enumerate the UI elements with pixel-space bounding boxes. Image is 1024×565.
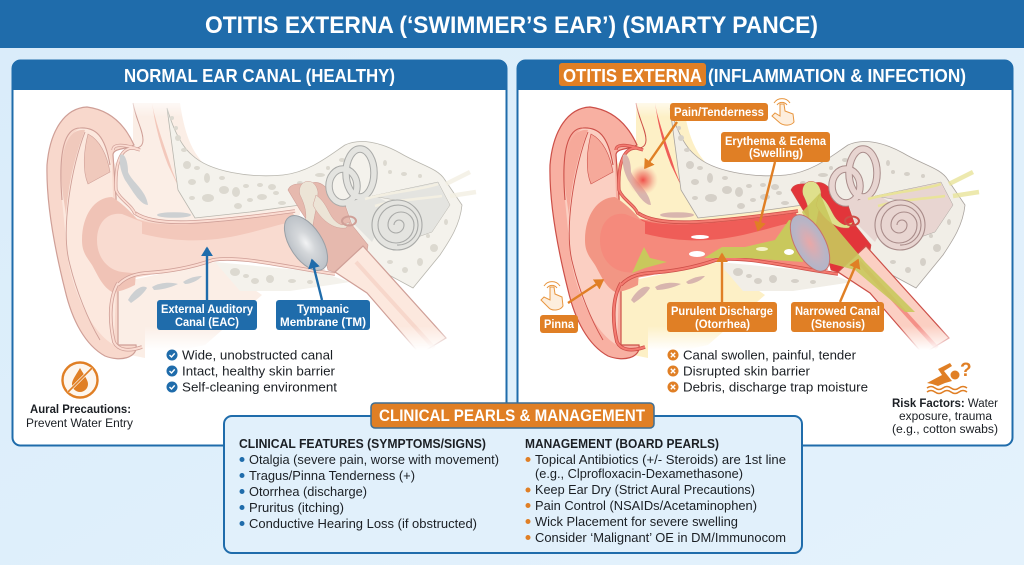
column: clinical features: Otalgia (severe pain, worse with movement): [249, 453, 499, 467]
label: purulent discharge: (Otorrhea): [695, 319, 750, 331]
label: tympanic membrane: Membrane (TM): [280, 317, 366, 329]
heading tag: clinical pearls: CLINICAL PEARLS & MANAGEMENT: [379, 406, 646, 425]
label: purulent discharge: [667, 302, 777, 332]
text: risk factors: exposure, trauma: [899, 411, 993, 423]
panel heading: normal: [12, 60, 507, 90]
panel heading: otitis externa: [517, 60, 1013, 90]
icon: swimmer: [927, 360, 972, 394]
panel heading: otitis externa: (INFLAMMATION & INFECTION): [708, 66, 966, 86]
inflammation: pus discharge in canal: [632, 193, 915, 312]
column: management: Pain Control (NSAIDs/Acetaminophen): [535, 499, 757, 513]
checklist: otitis features: Disrupted skin barrier: [683, 364, 810, 378]
illustration: inflamed ear anatomy: [550, 95, 979, 364]
label: pain/tenderness: Pain/Tenderness: [674, 107, 764, 119]
label: pinna: [540, 315, 578, 333]
label: tympanic membrane: Tympanic: [297, 304, 350, 316]
label: external auditory canal: Canal (EAC): [175, 317, 239, 329]
arrow: pain: [645, 122, 677, 168]
checklist: healthy features: Wide, unobstructed canal: [182, 348, 333, 362]
text: aural precautions: Prevent Water Entry: [26, 418, 133, 430]
column: management: [525, 437, 786, 545]
column: clinical features: [239, 437, 499, 531]
label: external auditory canal: External Auditory: [161, 304, 254, 316]
column: clinical features: Tragus/Pinna Tenderness (+): [249, 469, 415, 483]
label: narrowed canal: (Stenosis): [811, 319, 865, 331]
arrow: EAC: [206, 248, 208, 300]
column: management: Keep Ear Dry (Strict Aural Precautions): [535, 483, 755, 497]
illustration: healthy ear anatomy: [47, 95, 476, 364]
arrow: narrowed: [840, 260, 858, 302]
title banner: OTITIS EXTERNA (‘SWIMMER’S EAR’) (SMARTY PANCE): [205, 12, 818, 39]
label: narrowed canal: Narrowed Canal: [795, 306, 880, 318]
icon: pressing hand left: [541, 282, 563, 310]
icon: swimmer: ?: [960, 360, 972, 381]
arrow: purulent: [721, 254, 723, 302]
panel: otitis externa: [517, 60, 1013, 446]
checklist: healthy features: Intact, healthy skin barrier: [182, 364, 335, 378]
icon: no water drop: [62, 362, 98, 398]
checklist: healthy features: Self-cleaning environment: [182, 380, 338, 394]
label: tympanic membrane: [276, 300, 370, 330]
title banner: [0, 0, 1024, 48]
label: erythema and edema: (Swelling): [749, 148, 803, 160]
checklist: healthy features: [166, 348, 338, 394]
panel: clinical pearls and management: [224, 403, 802, 553]
text: risk factors: (e.g., cotton swabs): [892, 424, 998, 436]
label: erythema and edema: Erythema & Edema: [725, 136, 827, 148]
icon: pressing hand top: [772, 99, 794, 125]
text: aural precautions: Aural Precautions:: [30, 404, 131, 416]
text: aural precautions: [26, 404, 133, 430]
column: management: Consider ‘Malignant’ OE in DM/Immunocom: [535, 531, 786, 545]
arrow: TM: [312, 260, 322, 300]
tympanic membrane: inflamed: [782, 209, 838, 277]
label: erythema and edema: [721, 132, 830, 162]
heading tag: clinical pearls: [371, 403, 654, 428]
text: risk factors: [892, 398, 998, 436]
column: clinical features: Conductive Hearing Loss (if obstructed): [249, 517, 477, 531]
arrow: pinna: [568, 280, 603, 303]
arrow: erythema: [758, 162, 775, 230]
label: pain/tenderness: [670, 103, 768, 121]
panel heading: normal: NORMAL EAR CANAL (HEALTHY): [124, 66, 395, 86]
checklist: otitis features: Debris, discharge trap moisture: [683, 380, 868, 394]
column: management: (e.g., Clprofloxacin-Dexamethasone): [535, 467, 743, 481]
tympanic membrane: normal: [276, 208, 336, 278]
inflamed tragus hotspot: [628, 165, 658, 195]
label: pinna: Pinna: [544, 319, 575, 331]
label: narrowed canal: [791, 302, 884, 332]
panel: normal ear canal: [12, 60, 507, 446]
label: purulent discharge: Purulent Discharge: [671, 306, 773, 318]
column: clinical features: Otorrhea (discharge): [249, 485, 367, 499]
column: clinical features: Pruritus (itching): [249, 501, 344, 515]
text: risk factors: Risk Factors: Water: [892, 398, 998, 410]
column: management: Topical Antibiotics (+/- Steroids) are 1st line: [535, 453, 786, 467]
column: clinical features: CLINICAL FEATURES (SYMPTOMS/SIGNS): [239, 437, 486, 451]
checklist: otitis features: Canal swollen, painful, tender: [683, 348, 856, 362]
checklist: otitis features: [668, 348, 868, 394]
column: management: Wick Placement for severe swelling: [535, 515, 738, 529]
panel heading: otitis externa: OTITIS EXTERNA: [563, 66, 702, 86]
label: external auditory canal: [157, 300, 257, 330]
column: management: MANAGEMENT (BOARD PEARLS): [525, 437, 719, 451]
